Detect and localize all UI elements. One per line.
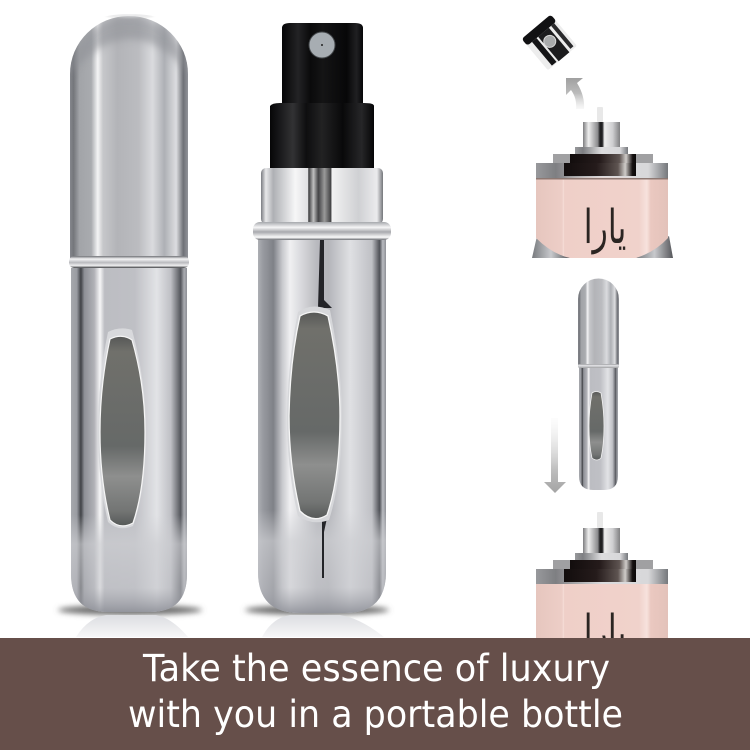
atomizer stick [597,107,603,122]
small window [589,392,604,460]
silver flange [253,222,391,240]
body [258,238,386,613]
caption text [128,647,623,736]
top perfume bottle [532,107,673,258]
nozzle hole [309,32,335,58]
neck step [553,560,653,569]
down arrow [544,418,566,493]
lower perfume bottle [536,512,668,638]
bottle cap [70,16,188,258]
stem flange [575,553,628,560]
curved up arrow [566,78,584,109]
neck step [553,154,653,163]
pink bottle body [536,178,668,258]
small body [579,368,618,490]
body seam [318,240,332,578]
silver cylinder [583,122,620,148]
silver cylinder [583,528,620,554]
bottle label calligraphy: يارا [584,201,626,255]
atomizer stick [597,512,603,528]
left closed bottle [58,14,202,637]
window highlight frame [98,328,146,528]
floor shadow and reflection [58,605,202,637]
neck collar [536,163,668,178]
pink bottle body [536,584,668,644]
caption text: with you in a portable bottle [128,693,623,736]
stem flange [575,147,628,154]
viewing window [289,312,340,519]
bottle label calligraphy: يارا [584,606,626,660]
caption text: Take the essence of luxury [142,647,610,690]
right open spray bottle [245,23,391,637]
caption banner [0,638,750,750]
removed nozzle cap [522,14,577,70]
silver collar [261,168,383,224]
black spray nozzle [282,23,363,104]
silver ring [69,256,189,268]
small cap [578,278,619,366]
black collar [270,103,374,168]
bottom silver feet [532,236,673,258]
bottle body [71,268,187,612]
window highlight frame [287,306,342,522]
neck collar [536,569,668,584]
small closed bottle [578,278,619,490]
small ring [578,364,619,368]
floor shadow and reflection [245,605,389,637]
viewing window [100,336,145,526]
